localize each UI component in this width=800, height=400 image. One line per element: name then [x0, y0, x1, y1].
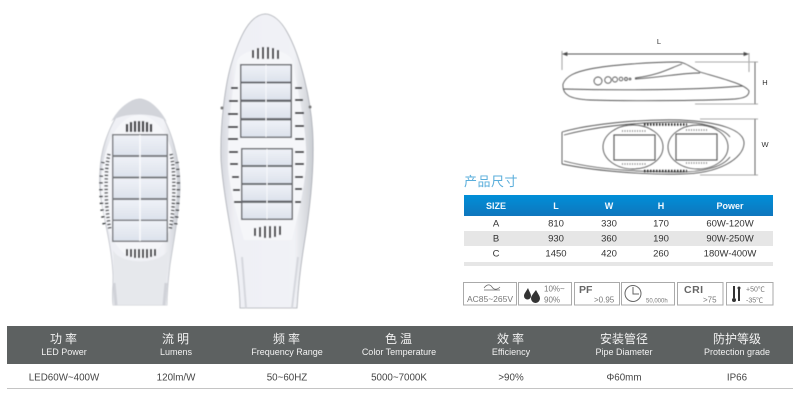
spec column: lumens: Lumens — [160, 347, 193, 357]
table rows: 190 — [653, 234, 669, 244]
spec column: color temperature: 色温 — [385, 332, 415, 346]
spec column: lumens — [160, 332, 193, 357]
label W: W — [761, 140, 769, 149]
spec values: LED60W~400W — [29, 372, 100, 384]
width arrow — [754, 119, 756, 175]
table rows: 930 — [548, 234, 564, 244]
small street lamp — [100, 99, 180, 305]
bottom vent slots — [255, 226, 280, 238]
table rows: 360 — [601, 234, 617, 244]
icon: temperature: +50℃ — [746, 286, 765, 294]
icon: temperature: -35℃ — [746, 296, 763, 304]
LED modules — [112, 134, 168, 242]
icon: lifespan clock: 50,000h — [646, 298, 668, 304]
table rows: 180W-400W — [704, 248, 756, 260]
spec values — [29, 372, 748, 384]
top vent slots — [127, 121, 151, 132]
spec column: LED power — [41, 331, 87, 357]
icon: power factor — [574, 282, 620, 305]
table rows: 330 — [601, 218, 617, 230]
table rows — [493, 218, 756, 260]
spec column: pipe diameter: Pipe Diameter — [595, 347, 653, 357]
length arrow — [563, 53, 748, 55]
table rows: 90W-250W — [706, 234, 754, 244]
table rows: 260 — [653, 248, 669, 260]
lower LED modules — [241, 148, 293, 220]
table header: W — [605, 201, 614, 211]
table rows: 170 — [653, 218, 669, 230]
size table — [464, 195, 773, 266]
table header: Power — [716, 201, 744, 211]
spec column: efficiency: 效率 — [497, 331, 527, 346]
top vent slots — [253, 47, 278, 59]
spec header band — [7, 326, 793, 364]
spec values: 5000~7000K — [371, 372, 427, 384]
table rows: C — [493, 248, 500, 260]
icon: colour rendering index: CRI — [684, 284, 704, 296]
table header — [464, 195, 773, 216]
large street lamp — [220, 14, 313, 308]
spec column: frequency range — [251, 331, 323, 357]
table rows: 1450 — [545, 248, 567, 260]
spec column: frequency range: 频率 — [273, 331, 303, 346]
icon: lifespan clock — [622, 282, 674, 305]
table rows: 420 — [601, 248, 617, 260]
icon: humidity: 90% — [544, 296, 560, 304]
icon: humidity: 10%~ — [544, 284, 565, 294]
side vents — [101, 154, 178, 230]
table rows: 60W-120W — [706, 218, 754, 230]
bottom vent slots — [127, 249, 155, 258]
icon: voltage: AC85~265V — [467, 294, 513, 304]
spec values: IP66 — [727, 372, 748, 384]
table rows: B — [493, 234, 499, 244]
spec column: protection grade — [704, 331, 770, 357]
table header: SIZE — [486, 201, 506, 211]
icon: colour rendering index — [678, 282, 723, 305]
table rows: A — [493, 218, 500, 230]
spec column: color temperature — [362, 332, 436, 357]
table rows: 810 — [548, 218, 564, 230]
dimension drawing: side view — [562, 51, 758, 104]
spec column: protection grade: 防护等级 — [713, 331, 761, 346]
icon: humidity — [518, 282, 572, 305]
spec column: efficiency: Efficiency — [492, 347, 531, 357]
icon: power factor: >0.95 — [594, 296, 615, 304]
spec column: frequency range: Frequency Range — [251, 347, 323, 357]
spec column: pipe diameter — [595, 331, 653, 357]
label L: L — [657, 37, 661, 46]
upper LED modules — [240, 64, 292, 138]
table header: L — [553, 201, 559, 211]
spec column: protection grade: Protection grade — [704, 347, 770, 357]
height arrow — [754, 62, 756, 104]
icon: temperature — [726, 282, 773, 305]
dimension drawing: top view — [562, 119, 758, 175]
spec column: lumens: 流明 — [162, 332, 192, 346]
spec values: 50~60HZ — [267, 372, 307, 384]
icon: power factor: PF — [579, 284, 593, 296]
spec column: pipe diameter: 安装管径 — [600, 331, 648, 346]
spec values: >90% — [498, 372, 524, 384]
spec values: Φ60mm — [606, 372, 642, 384]
spec column: LED power: 功率 — [50, 331, 80, 346]
heading: product size: 产品尺寸 — [464, 174, 518, 189]
spec column: color temperature: Color Temperature — [362, 347, 436, 357]
specification table — [7, 326, 793, 389]
label H: H — [762, 78, 768, 87]
spec column: LED power: LED Power — [41, 347, 87, 357]
spec column: efficiency — [492, 331, 531, 357]
table header: H — [658, 201, 664, 211]
spec values: 120lm/W — [157, 372, 196, 384]
icon: colour rendering index: >75 — [703, 296, 717, 304]
icon: voltage — [464, 282, 516, 305]
side vents — [228, 88, 304, 202]
